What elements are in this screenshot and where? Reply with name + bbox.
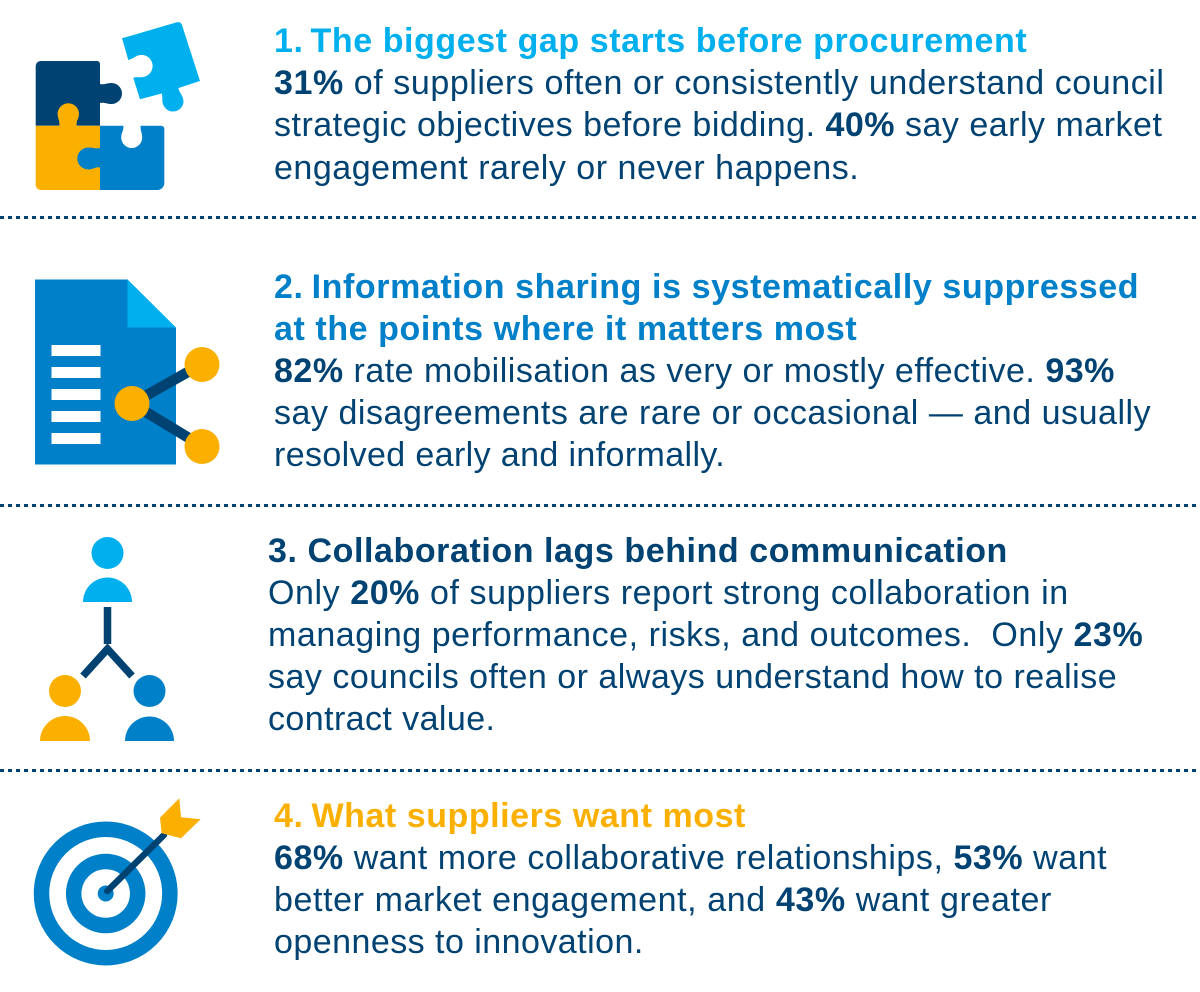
text line: Only 20% of suppliers report strong collaboration in: [268, 574, 1069, 612]
text line: openness to innovation.: [274, 923, 644, 961]
text line: managing performance, risks, and outcomes. Only 23%: [268, 616, 1143, 654]
heading 1: 1. The biggest gap starts before procurement: [274, 22, 1027, 60]
text line: engagement rarely or never happens.: [274, 149, 859, 187]
icon: document with share nodes: [35, 280, 220, 464]
text line: say disagreements are rare or occasional — and usually: [274, 394, 1151, 432]
text line: better market engagement, and 43% want greater: [274, 881, 1052, 919]
text line: 82% rate mobilisation as very or mostly effective. 93%: [274, 352, 1115, 390]
icon: target with arrow: [34, 798, 201, 966]
heading 4: 4. What suppliers want most: [274, 797, 746, 835]
heading and text: item 1: [274, 22, 1165, 187]
heading and text: item 4: [274, 797, 1107, 961]
text line: 68% want more collaborative relationships, 53% want: [274, 839, 1107, 877]
heading 2 line 1: 2. Information sharing is systematically suppressed: [274, 268, 1139, 306]
text line: 31% of suppliers often or consistently understand council: [274, 64, 1165, 102]
text line: contract value.: [268, 700, 495, 738]
text line: resolved early and informally.: [274, 436, 725, 474]
heading 3: 3. Collaboration lags behind communication: [268, 532, 1008, 570]
text line: strategic objectives before bidding. 40% say early market: [274, 106, 1162, 144]
text line: say councils often or always understand how to realise: [268, 658, 1117, 696]
heading and text: item 3: [268, 532, 1143, 738]
heading 2 line 2: at the points where it matters most: [274, 310, 857, 348]
icon: people hierarchy: [40, 537, 174, 741]
heading and text: item 2: [274, 268, 1151, 474]
icon: puzzle pieces: [36, 22, 200, 190]
